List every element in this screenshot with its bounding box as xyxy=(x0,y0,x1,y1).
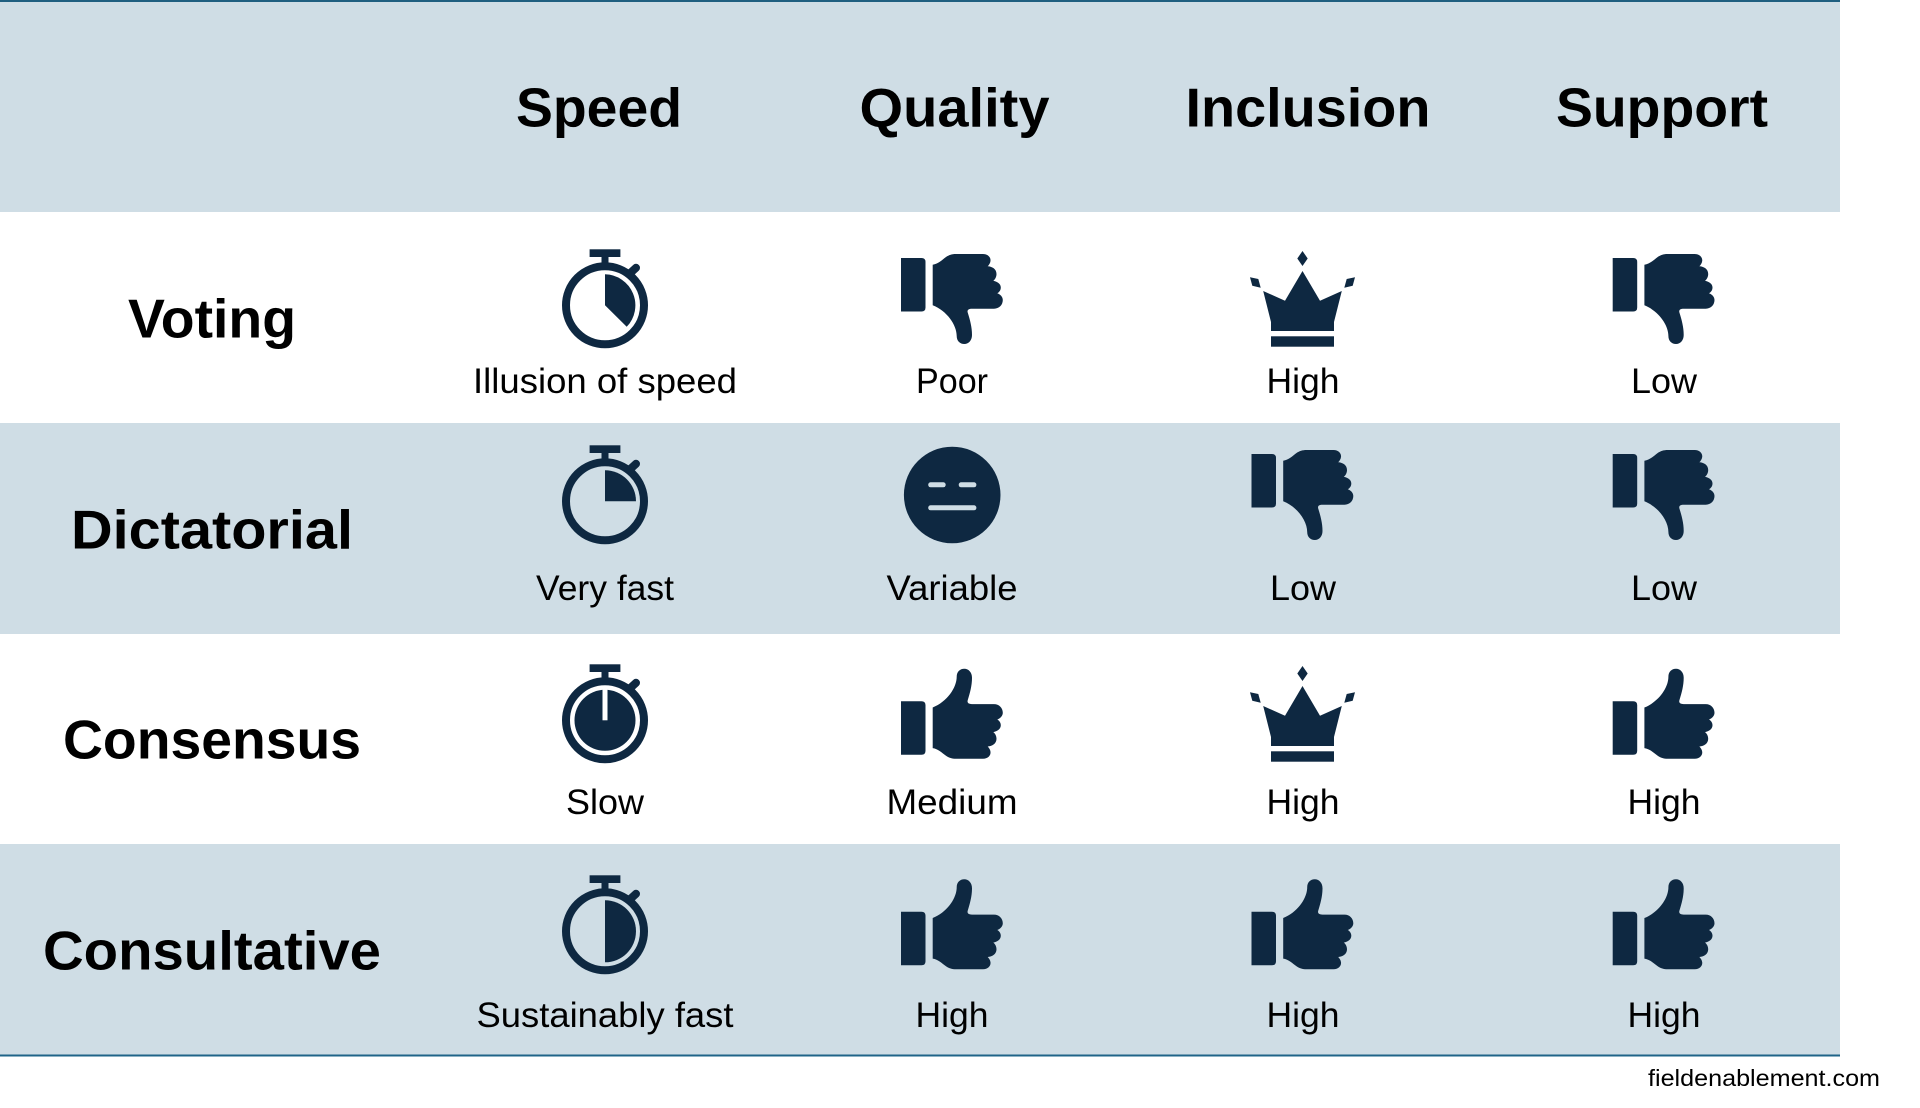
icon: thumbs up xyxy=(1252,879,1353,969)
icon: neutral face xyxy=(904,447,1000,543)
panel: header row xyxy=(0,0,1840,212)
cell: Dictatorial inclusion xyxy=(1252,450,1353,608)
row label: Consensus: Consensus xyxy=(63,708,361,770)
cell: Dictatorial quality xyxy=(886,447,1018,608)
icon: thumbs down xyxy=(901,254,1003,344)
icon: stopwatch with quarter wedge xyxy=(566,445,644,540)
cell: Voting quality xyxy=(901,254,1003,401)
icon: thumbs up xyxy=(901,669,1003,759)
cell: Consultative inclusion: High xyxy=(1266,996,1340,1035)
cell: Consultative quality: High xyxy=(916,996,988,1035)
heading: Support: Support xyxy=(1556,76,1768,138)
row label: Voting: Voting xyxy=(128,288,296,350)
cell: Dictatorial speed xyxy=(536,445,674,608)
icon: thumbs down xyxy=(1252,450,1353,540)
cell: Dictatorial inclusion: Low xyxy=(1270,569,1337,608)
icon: thumbs down xyxy=(1613,450,1714,540)
panel: row Consultative xyxy=(0,844,1840,1056)
icon: thumbs up xyxy=(1613,879,1714,969)
panel: row Consensus xyxy=(0,634,1840,844)
cell: Voting inclusion xyxy=(1250,251,1355,401)
cell: Voting support xyxy=(1613,254,1714,401)
heading: Speed: Speed xyxy=(516,76,682,138)
icon: stopwatch half xyxy=(566,875,644,970)
cell: Consensus support xyxy=(1613,669,1714,822)
icon: thumbs up xyxy=(1613,669,1714,759)
source credit: fieldenablement.com xyxy=(1648,1065,1880,1091)
icon: thumbs down xyxy=(1613,254,1714,344)
cell: Consensus quality xyxy=(886,669,1018,822)
icon: crown xyxy=(1250,666,1355,762)
cell: Consultative speed xyxy=(476,875,734,1035)
row label: Dictatorial: Dictatorial xyxy=(71,498,353,560)
cell: Dictatorial speed: Very fast xyxy=(536,569,674,608)
cell: Consultative quality xyxy=(901,879,1003,1035)
cell: Consensus inclusion xyxy=(1250,666,1355,822)
cell: Consensus speed xyxy=(566,664,645,822)
cell: Voting quality: Poor xyxy=(916,362,988,401)
icon: thumbs up xyxy=(901,879,1003,969)
heading: Quality: Quality xyxy=(860,76,1050,138)
icon: crown xyxy=(1250,251,1355,347)
cell: Consultative support: High xyxy=(1628,996,1700,1035)
cell: Consultative support xyxy=(1613,879,1714,1035)
panel: row Dictatorial xyxy=(0,423,1840,634)
cell: Dictatorial support: Low xyxy=(1631,569,1698,608)
icon: stopwatch with wedge xyxy=(566,249,644,344)
cell: Consensus speed: Slow xyxy=(566,783,645,822)
cell: Consensus inclusion: High xyxy=(1266,783,1340,822)
cell: Dictatorial support xyxy=(1613,450,1714,608)
cell: Consultative speed: Sustainably fast xyxy=(476,996,734,1035)
cell: Voting inclusion: High xyxy=(1266,362,1340,401)
panel: row Voting xyxy=(0,212,1840,423)
cell: Consensus quality: Medium xyxy=(886,783,1018,822)
cell: Dictatorial quality: Variable xyxy=(886,569,1018,608)
cell: Voting speed xyxy=(473,249,737,401)
cell: Consultative inclusion xyxy=(1252,879,1353,1035)
cell: Voting support: Low xyxy=(1631,362,1698,401)
cell: Consensus support: High xyxy=(1628,783,1700,822)
row label: Consultative: Consultative xyxy=(43,920,381,982)
cell: Voting speed: Illusion of speed xyxy=(473,362,737,401)
heading: Inclusion: Inclusion xyxy=(1186,76,1430,138)
icon: stopwatch full xyxy=(566,664,644,759)
